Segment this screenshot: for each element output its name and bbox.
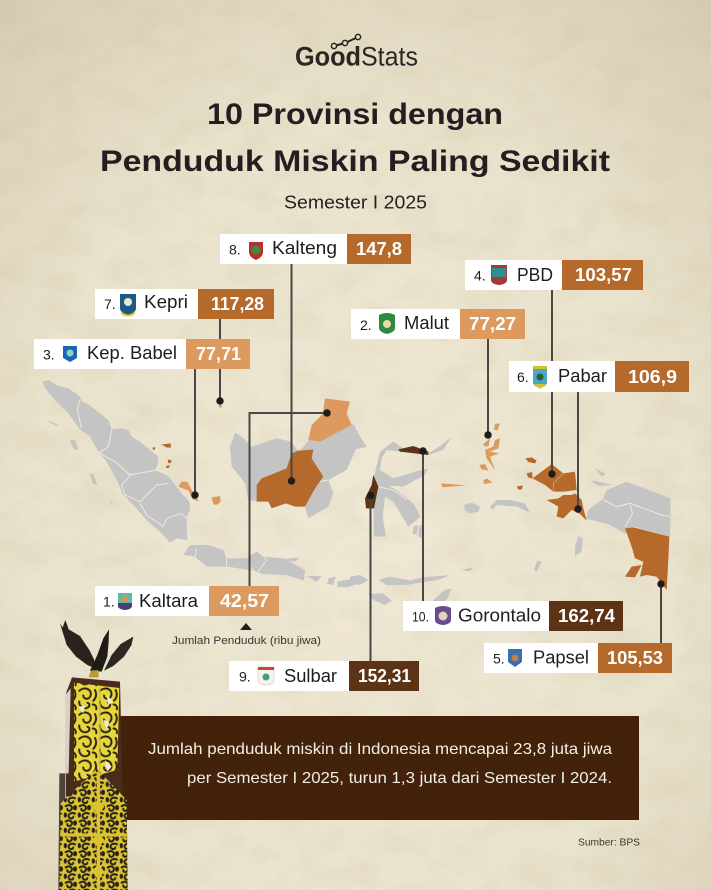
label: Kalteng 147,8: 147,8 xyxy=(356,239,402,259)
title xyxy=(100,98,610,178)
label: Malut 77,27: 2. xyxy=(360,317,372,333)
eastern islands: Sulawesi, Maluku, Papua xyxy=(350,423,671,605)
label: Kep. Babel 77,71: 77,71 xyxy=(196,344,241,364)
label: Kep. Babel 77,71 xyxy=(34,339,250,369)
label: Papsel 105,53: 5. xyxy=(493,650,505,666)
label: Kepri 117,28: Kepri xyxy=(144,292,188,312)
label: Papsel 105,53: 105,53 xyxy=(607,648,663,668)
label: Malut 77,27 xyxy=(351,309,525,339)
label: Malut 77,27: Malut xyxy=(404,313,449,333)
label: Kep. Babel 77,71: 3. xyxy=(43,346,55,362)
bird xyxy=(60,620,133,677)
label: Sulbar 152,31 xyxy=(229,661,419,691)
label: PBD 103,57: 103,57 xyxy=(575,265,632,285)
label: Papsel 105,53 xyxy=(484,643,672,673)
title: Penduduk Miskin Paling Sedikit xyxy=(100,145,610,178)
label: Pabar 106,9: 6. xyxy=(517,369,529,385)
label: Kaltara 42,57: Kaltara xyxy=(139,591,199,611)
label: Kaltara 42,57 xyxy=(95,586,279,616)
label: Kep. Babel 77,71: Kep. Babel xyxy=(87,343,177,363)
label: Kalteng 147,8: 8. xyxy=(229,242,241,258)
label: Kalteng 147,8: Kalteng xyxy=(272,238,337,258)
label: Kepri 117,28: 117,28 xyxy=(211,294,264,314)
callout panel: per Semester I 2025, turun 1,3 juta dari Semester I 2024. xyxy=(187,770,612,787)
logo: GoodStats xyxy=(295,34,418,72)
label: Kepri 117,28 xyxy=(95,289,274,319)
label: Kaltara 42,57: 1. xyxy=(103,594,115,610)
western islands: Sumatra, Java, Kalimantan xyxy=(43,380,367,587)
source note: Sumber: BPS xyxy=(578,836,640,848)
label: PBD 103,57 xyxy=(465,260,643,290)
tower shield xyxy=(58,768,128,890)
legend note: Jumlah Penduduk: Jumlah Penduduk (ribu jiwa) xyxy=(172,635,321,647)
legend note: Jumlah Penduduk xyxy=(172,623,321,647)
label: Pabar 106,9: Pabar xyxy=(558,366,607,386)
label: PBD 103,57: PBD xyxy=(517,265,553,285)
label: Kepri 117,28: 7. xyxy=(104,296,116,312)
logo: GoodStats: Stats xyxy=(361,42,418,72)
label: Sulbar 152,31: Sulbar xyxy=(284,666,337,686)
label: Sulbar 152,31: 9. xyxy=(239,668,251,684)
label: Malut 77,27: 77,27 xyxy=(469,314,516,334)
label: Pabar 106,9 xyxy=(509,361,689,392)
tower body xyxy=(65,677,123,797)
map of Indonesia xyxy=(43,380,671,605)
label: Kaltara 42,57: 42,57 xyxy=(220,591,269,611)
label: Pabar 106,9: 106,9 xyxy=(628,367,677,387)
title: 10 Provinsi dengan xyxy=(207,98,503,131)
illustration: bird monument tower xyxy=(58,620,133,890)
logo: GoodStats: Good xyxy=(295,42,361,72)
label: PBD 103,57: 4. xyxy=(474,268,486,284)
label: Sulbar 152,31: 152,31 xyxy=(358,666,411,686)
label: Kalteng 147,8 xyxy=(220,234,411,264)
callout panel: Jumlah penduduk miskin di Indonesia mencapai 23,8 juta jiwa xyxy=(148,741,612,758)
subtitle: Semester I 2025 xyxy=(284,192,427,212)
callout panel xyxy=(120,716,639,820)
label: Papsel 105,53: Papsel xyxy=(533,648,589,668)
label: Gorontalo 162,74: Gorontalo xyxy=(458,606,541,626)
connector lines and dots xyxy=(191,264,665,661)
label: Gorontalo 162,74: 10. xyxy=(412,608,429,624)
label: Gorontalo 162,74: 162,74 xyxy=(558,606,615,626)
label: Gorontalo 162,74 xyxy=(403,601,623,631)
